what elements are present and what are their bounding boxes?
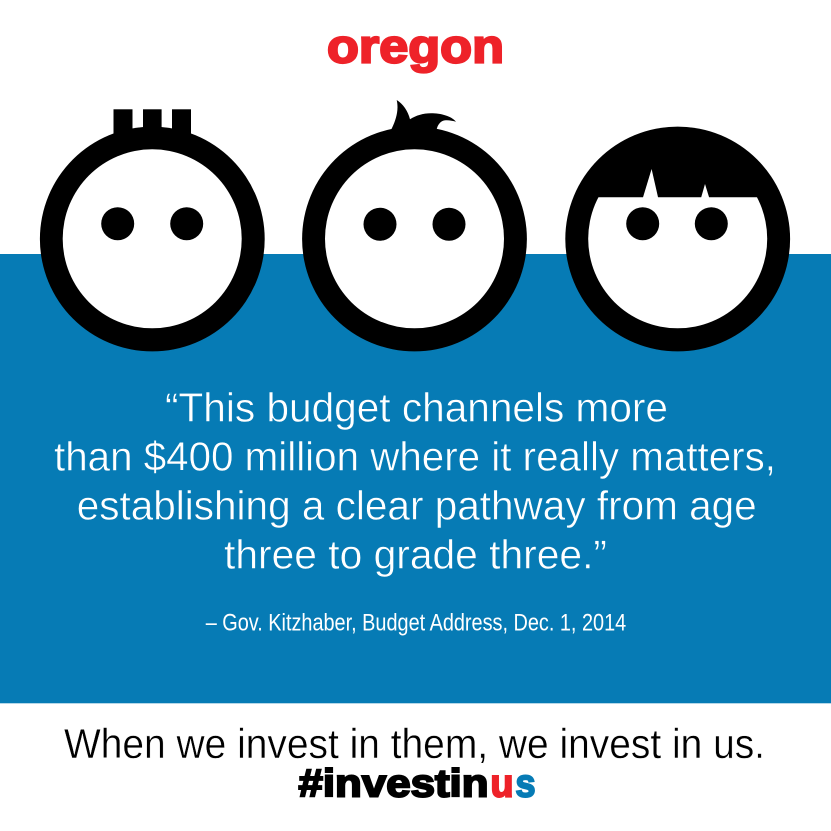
character: face with fringe hair — [565, 127, 790, 351]
logo: oregon: oregon — [327, 20, 504, 73]
quote: “This budget channels more — [165, 385, 668, 431]
character: face with swooping hair tuft — [302, 100, 527, 351]
quote: establishing a clear pathway from age — [77, 482, 757, 528]
tagline: When we invest in them, we invest in us. — [64, 720, 765, 767]
hashtag: #investin — [298, 762, 488, 806]
attribution: – Gov. Kitzhaber, Budget Address, Dec. 1, 2014 — [206, 610, 626, 636]
hashtag: u — [490, 762, 514, 806]
quote — [54, 385, 776, 578]
quote: than $400 million where it really matters, — [54, 434, 776, 480]
character: face with three square hair tufts — [40, 109, 265, 351]
hashtag: s — [516, 762, 536, 806]
blue panel — [0, 254, 831, 703]
quote: three to grade three.” — [224, 532, 607, 578]
